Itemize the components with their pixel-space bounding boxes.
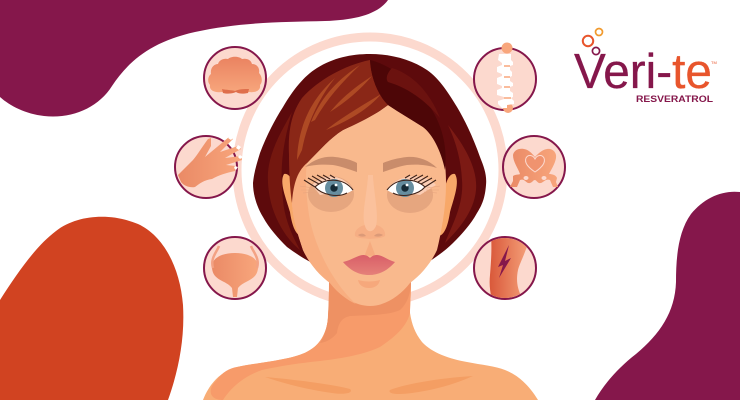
hair strand left xyxy=(268,112,300,250)
blob: top-left purple xyxy=(0,0,388,116)
chin highlight xyxy=(358,280,380,288)
icon: knee with pain bolt xyxy=(474,235,536,305)
right eye xyxy=(387,175,440,197)
face xyxy=(292,105,446,306)
nose highlight xyxy=(364,175,377,231)
icon: lightning bolt xyxy=(498,245,511,278)
blob: bottom-right purple xyxy=(595,192,740,400)
fringe red xyxy=(289,60,388,203)
nostrils xyxy=(358,234,383,237)
decorative ring xyxy=(237,37,503,303)
icon: arthritic hand xyxy=(175,136,243,198)
right strand highlight xyxy=(387,68,440,118)
chin shadow xyxy=(320,280,411,343)
icon: spine xyxy=(474,42,536,113)
logo subtitle: RESVERATROL xyxy=(636,94,713,105)
logo wordmark: Veri-te xyxy=(574,45,712,99)
collarbone left xyxy=(265,377,351,394)
nose xyxy=(355,175,385,239)
hair strand right xyxy=(445,125,476,243)
shoulders and neck xyxy=(203,280,538,400)
logo trademark: TM xyxy=(711,60,717,65)
collarbone right xyxy=(390,376,473,394)
fringe highlights xyxy=(297,65,381,160)
side hair dark sweep xyxy=(370,60,446,170)
eye bags xyxy=(308,176,354,212)
icon: brain xyxy=(204,47,266,109)
icon: bladder xyxy=(204,237,266,299)
left eye xyxy=(300,175,353,197)
blob: left orange xyxy=(0,217,183,400)
face side shadow xyxy=(292,163,356,304)
logo: Veri-te Resveratrol xyxy=(574,28,717,105)
philtrum xyxy=(365,241,375,256)
lips xyxy=(343,255,395,275)
hair back xyxy=(253,54,486,263)
icon: pelvis xyxy=(503,136,565,198)
logo bubbles xyxy=(583,28,602,55)
eyebrows xyxy=(305,157,357,172)
neck shadow xyxy=(211,280,411,400)
ears xyxy=(282,174,302,236)
illustration: woman's portrait xyxy=(203,54,538,400)
